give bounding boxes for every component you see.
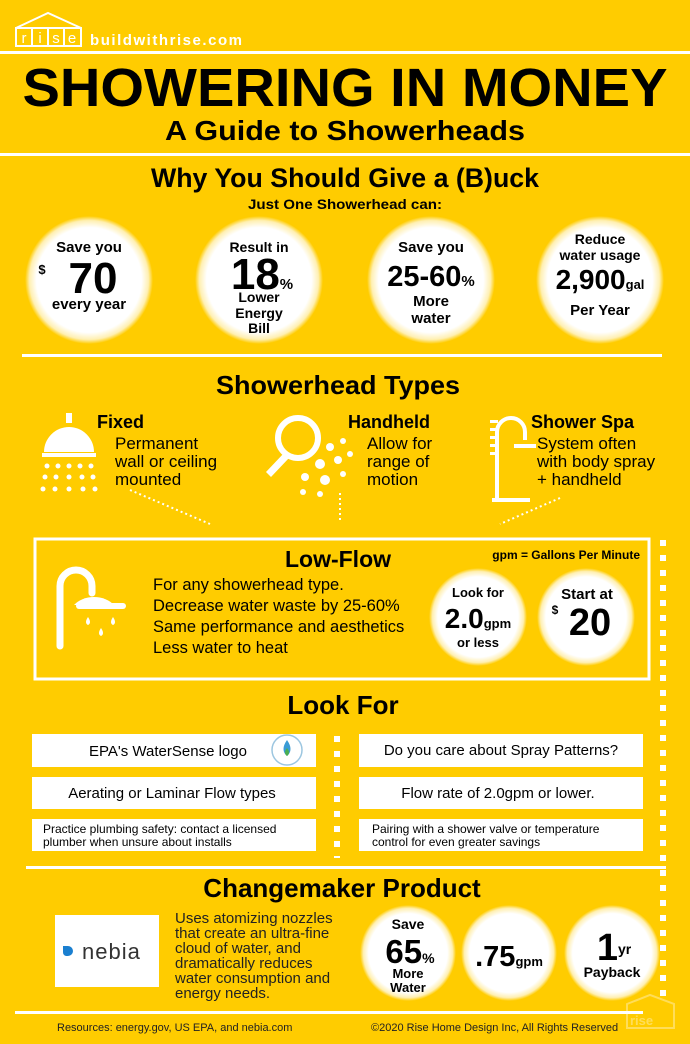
circle: 1yr bbox=[564, 905, 660, 1001]
panel: nebia: cloud of water, and bbox=[175, 940, 301, 957]
type: shower spa: Shower Spa bbox=[531, 412, 635, 432]
circle: 2.0gpm: Look for bbox=[452, 585, 504, 600]
circle: 2.0gpm bbox=[429, 568, 527, 666]
heading: why: Just One Showerhead can: bbox=[248, 196, 442, 212]
box: watersense bbox=[32, 734, 316, 767]
box: pairing: control for even greater savings bbox=[372, 835, 540, 849]
panel: nebia: energy needs. bbox=[175, 985, 270, 1002]
circle: 1yr: yr bbox=[618, 941, 632, 957]
type: handheld: range of bbox=[367, 452, 430, 471]
circle: 1yr: 1 bbox=[597, 927, 618, 969]
icon: shower spa bbox=[492, 418, 536, 500]
nebia logo bbox=[55, 915, 159, 987]
box: plumbing safety bbox=[32, 819, 316, 851]
circle: .75gpm bbox=[461, 905, 557, 1001]
stat: 18%: Result in bbox=[229, 239, 289, 255]
stat: 25-60%: Save you bbox=[398, 239, 464, 256]
box: watersense: EPA's WaterSense logo bbox=[89, 743, 247, 760]
panel: low-flow: Decrease water waste by 25-60% bbox=[153, 597, 400, 615]
circle: 1yr: Payback bbox=[584, 964, 641, 980]
circle: 2.0gpm: 2.0gpm bbox=[445, 603, 511, 634]
type: fixed bbox=[40, 412, 217, 492]
logo header: r bbox=[22, 30, 26, 47]
heading: why bbox=[151, 163, 540, 212]
type: fixed: Fixed bbox=[97, 412, 144, 432]
circle: $20: 20 bbox=[569, 602, 611, 644]
type: shower spa bbox=[490, 412, 656, 500]
stat circles bbox=[25, 216, 664, 344]
circle: $20: $ bbox=[552, 603, 559, 617]
stat: 2,900gal bbox=[536, 216, 664, 344]
circle: 65% bbox=[360, 905, 456, 1001]
circle: 65%: More bbox=[392, 966, 424, 981]
box: flow rate bbox=[359, 777, 643, 809]
stat: 25-60%: 25-60% bbox=[387, 261, 475, 293]
stat: $70: 70 bbox=[69, 254, 117, 303]
footer: ©2020 Rise Home Design Inc, All Rights Reserved bbox=[371, 1022, 618, 1034]
type: handheld bbox=[266, 412, 433, 497]
panel: nebia: Uses atomizing nozzles bbox=[175, 910, 333, 927]
box: aerating bbox=[32, 777, 316, 809]
icon: handheld showerhead bbox=[266, 418, 353, 497]
stat: 25-60%: water bbox=[410, 310, 451, 327]
type: shower spa: System often bbox=[537, 434, 636, 453]
panel: low-flow bbox=[35, 539, 649, 679]
panel: low-flow: For any showerhead type. bbox=[153, 576, 344, 594]
footer: Resources: energy.gov, US EPA, and nebia.com bbox=[57, 1022, 292, 1034]
stat: 2,900gal: Per Year bbox=[570, 302, 630, 319]
stat: $70: Save you bbox=[56, 239, 122, 256]
title: SHOWERING IN MONEY bbox=[22, 58, 668, 118]
dotted connectors bbox=[130, 490, 560, 524]
type: fixed: Permanent bbox=[115, 434, 198, 453]
heading: look for: Look For bbox=[287, 690, 399, 720]
panel: low-flow: gpm = Gallons Per Minute bbox=[492, 548, 640, 562]
middle dotted vertical bbox=[334, 736, 340, 858]
logo header: s bbox=[52, 30, 60, 47]
type: shower spa: with body spray bbox=[536, 452, 656, 471]
look for boxes bbox=[32, 734, 643, 851]
stat: 2,900gal: Reduce bbox=[575, 231, 625, 247]
box: spray patterns: Do you care about Spray Patterns? bbox=[384, 742, 618, 759]
box: spray patterns bbox=[359, 734, 643, 767]
stat: 25-60%: More bbox=[413, 293, 449, 310]
panel: low-flow: Less water to heat bbox=[153, 639, 288, 657]
type: shower spa: + handheld bbox=[537, 470, 622, 489]
panel: low-flow: Same performance and aesthetics bbox=[153, 618, 404, 636]
type: handheld: Handheld bbox=[348, 412, 430, 432]
footer bbox=[57, 1022, 618, 1034]
circle: .75gpm: .75gpm bbox=[475, 941, 543, 973]
circle: 2.0gpm: or less bbox=[457, 635, 499, 650]
heading: showerhead types: Showerhead Types bbox=[216, 370, 460, 400]
type: handheld: motion bbox=[367, 470, 418, 489]
stat: $70: every year bbox=[52, 296, 126, 313]
box: plumbing safety: Practice plumbing safety: contact a licensed bbox=[43, 822, 276, 836]
stat: 18%: Energy bbox=[235, 305, 283, 321]
stat: 2,900gal: water usage bbox=[559, 247, 641, 263]
panel: nebia bbox=[55, 905, 660, 1002]
heading: changemaker: Changemaker Product bbox=[203, 873, 481, 903]
circle: $20: Start at bbox=[561, 586, 613, 603]
icon: low-flow shower bbox=[60, 570, 126, 646]
stat: 2,900gal: 2,900gal bbox=[556, 264, 644, 295]
panel: nebia: dramatically reduces bbox=[175, 955, 313, 972]
stat: $70 bbox=[25, 216, 153, 344]
box: pairing: Pairing with a shower valve or temperature bbox=[372, 822, 600, 836]
circle: 65%: 65% bbox=[385, 933, 435, 970]
type: fixed: wall or ceiling bbox=[114, 452, 217, 471]
logo header bbox=[16, 13, 242, 49]
heading: why: Why You Should Give a (B)uck bbox=[151, 163, 540, 193]
stat: $70: $ bbox=[38, 262, 46, 277]
panel: nebia: water consumption and bbox=[174, 970, 330, 987]
circle: 65%: Water bbox=[390, 980, 426, 995]
panel: low-flow: Low-Flow bbox=[285, 546, 391, 572]
logo header: buildwithrise.com bbox=[90, 32, 242, 49]
stat: 18%: 18% bbox=[231, 250, 293, 299]
right dotted vertical bbox=[660, 540, 666, 1000]
stat: 25-60% bbox=[367, 216, 495, 344]
icon: fixed showerhead bbox=[40, 413, 98, 492]
faint logo bbox=[627, 995, 674, 1028]
faint logo: rise bbox=[630, 1013, 653, 1028]
icon: watersense logo bbox=[272, 735, 302, 765]
logo header: i bbox=[38, 30, 42, 47]
stat: 18%: Lower bbox=[238, 289, 280, 305]
subtitle: A Guide to Showerheads bbox=[165, 115, 525, 146]
nebia logo: nebia bbox=[82, 939, 141, 964]
box: pairing bbox=[359, 819, 643, 851]
circle: 65%: Save bbox=[392, 916, 425, 932]
circle: $20 bbox=[537, 568, 635, 666]
logo header: e bbox=[68, 30, 76, 47]
box: flow rate: Flow rate of 2.0gpm or lower. bbox=[401, 785, 595, 802]
panel: nebia: that create an ultra-fine bbox=[175, 925, 329, 942]
box: aerating: Aerating or Laminar Flow types bbox=[68, 785, 276, 802]
type: fixed: mounted bbox=[115, 470, 181, 489]
stat: 18% bbox=[195, 216, 323, 344]
stat: 18%: Bill bbox=[248, 320, 270, 336]
box: plumbing safety: plumber when unsure about installs bbox=[43, 835, 232, 849]
type: handheld: Allow for bbox=[367, 434, 433, 453]
